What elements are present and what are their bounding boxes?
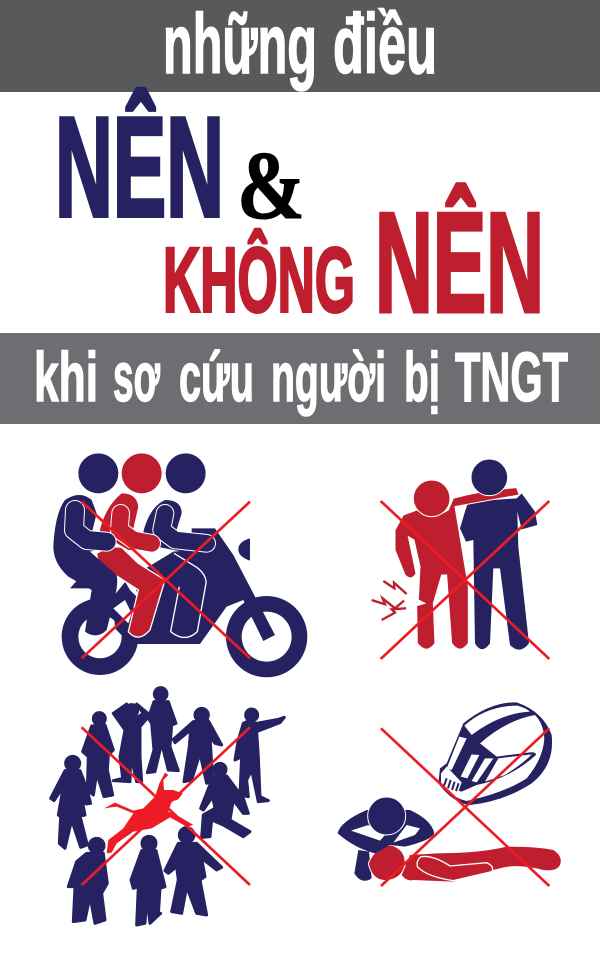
helmet bbox=[438, 702, 552, 805]
helper head bbox=[368, 797, 406, 835]
riders bbox=[53, 493, 213, 637]
rear rider bbox=[53, 495, 117, 635]
rear wheel bbox=[62, 598, 138, 675]
red cross bbox=[82, 727, 250, 885]
casualty arm bbox=[417, 856, 493, 881]
pain bolts bbox=[372, 581, 407, 620]
injured person in red bbox=[395, 488, 519, 649]
red cross bbox=[381, 501, 549, 659]
casualty hip bbox=[368, 845, 405, 881]
navy helper bbox=[460, 493, 537, 650]
icon: three people on a motorbike, crossed out bbox=[53, 453, 307, 677]
rear fender bbox=[70, 580, 95, 588]
subtitle banner: bị bbox=[404, 338, 440, 416]
icon: removing a helmet from a victim, crossed out bbox=[338, 702, 561, 886]
front rider bbox=[143, 500, 213, 637]
red casualty lying down bbox=[402, 847, 561, 882]
navy helper head bbox=[471, 459, 508, 496]
casualty and helper bbox=[338, 797, 561, 882]
heads bbox=[78, 453, 206, 493]
top banner bbox=[0, 0, 600, 92]
headlight bbox=[238, 538, 250, 561]
subtitle banner: người bbox=[271, 338, 386, 416]
heading: KHÔNG: KHÔNG bbox=[163, 228, 355, 332]
crowd silhouettes bbox=[51, 688, 284, 925]
icon: carrying an injured person, crossed out bbox=[372, 459, 549, 659]
gap highlights bbox=[86, 553, 140, 623]
front wheel bbox=[226, 596, 307, 677]
motorbike frame bbox=[113, 528, 275, 644]
red cross bbox=[82, 502, 250, 658]
subtitle banner: sơ bbox=[113, 338, 160, 416]
injured head bbox=[413, 480, 450, 517]
heading: NÊN: NÊN bbox=[55, 88, 224, 247]
icon: crowd around a victim, crossed out bbox=[51, 688, 284, 925]
middle rider bbox=[97, 493, 165, 637]
helper leg bbox=[354, 850, 372, 881]
subtitle banner: cứu bbox=[179, 338, 254, 416]
red cross bbox=[381, 728, 549, 886]
helper arms bbox=[338, 810, 434, 853]
victim figure bbox=[104, 773, 193, 853]
heading: ampersand: & bbox=[237, 132, 305, 240]
subtitle banner bbox=[0, 333, 600, 424]
subtitle banner: khi bbox=[34, 338, 98, 416]
